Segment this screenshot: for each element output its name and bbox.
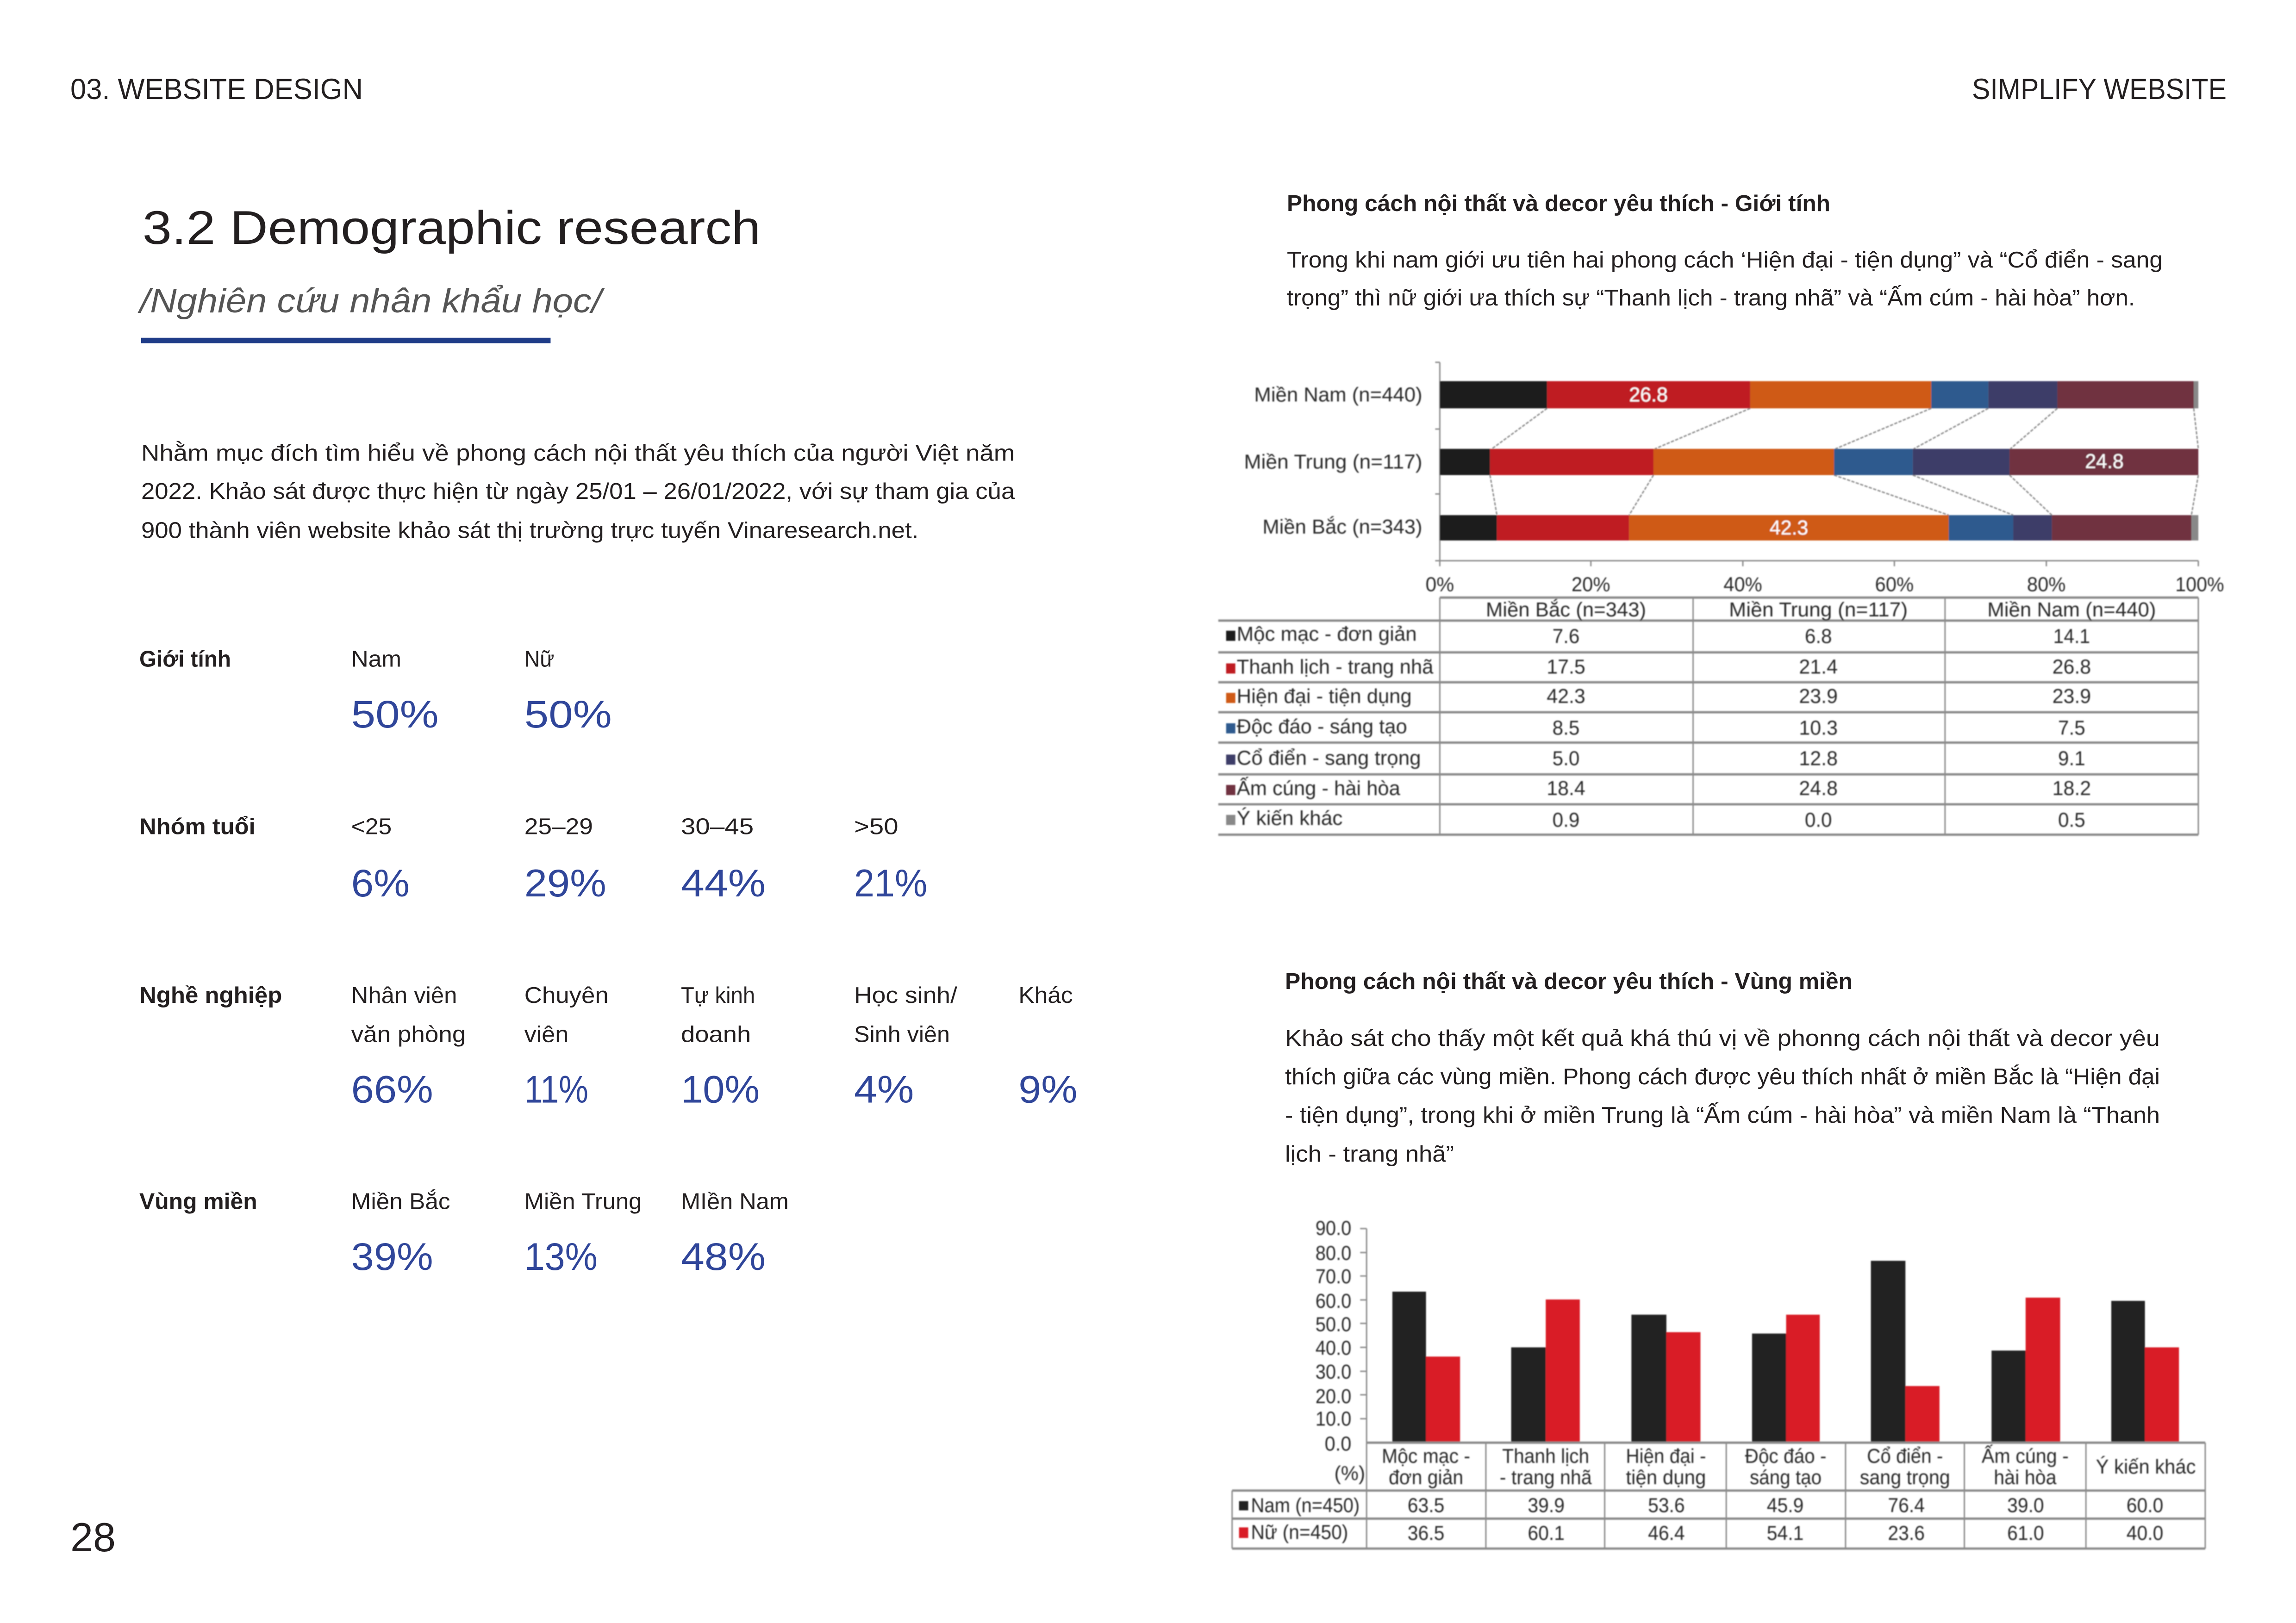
heading: region section: Phong cách nội thất và decor yêu thích - Vùng miền [1285,969,1853,994]
row: Nam: 76.4 [1888,1494,1925,1517]
title underline [141,338,550,343]
region labels: Miền Trung (n=117) [1244,451,1423,473]
stat: 30-45 [681,815,766,905]
category labels: Ý kiến khác [2096,1455,2196,1478]
y axis and labels: 30.0 [1316,1361,1351,1383]
row: cozy: 18.4 [1547,777,1585,800]
row: cozy: 18.2 [2053,777,2091,800]
category labels: sáng tạo [1750,1466,1822,1489]
row: Nữ: 60.1 [1528,1522,1565,1544]
chart: stacked bars by region [1218,362,2224,835]
stat: south [681,1189,789,1278]
bars: Nữ (red) [1426,1298,2179,1443]
stat: office workers: Nhân viên [351,983,457,1008]
stat: students [854,983,957,1111]
label: occupation: Nghề nghiệp [139,983,282,1008]
stat: 30-45: 44% [681,861,766,905]
row: classic: 12.8 [1799,747,1838,770]
intro paragraph: 2022. Khảo sát được thực hiện từ ngày 25/01 – 26/01/2022, với sự tham gia của [141,479,1015,504]
row: modern [1226,685,2091,708]
category labels: đơn giản [1389,1466,1463,1489]
panel: region stats [139,1189,789,1278]
stat: central: 13% [524,1235,598,1278]
stat: under 25: <25 [351,815,392,839]
title: 3.2 Demographic research [143,201,761,254]
stat: other [1018,983,1078,1111]
y axis and labels: 80.0 [1316,1242,1351,1264]
header: project name: SIMPLIFY WEBSITE [1972,73,2227,106]
category labels: tiện dụng [1626,1466,1706,1489]
stat: south: 48% [681,1235,766,1278]
stat: 25-29: 25–29 [524,815,593,839]
text block: gender section: Trong khi nam giới ưu tiên hai phong cách ‘Hiện đại - tiện dụng” và “Cổ điển - sang [1287,248,2163,273]
row: cozy [1226,777,2091,800]
percent axis labels: 80% [2027,573,2065,596]
row: classic [1226,746,2085,770]
row: Nữ: 46.4 [1648,1522,1685,1544]
y axis and labels: 20.0 [1316,1385,1351,1408]
stat: central [524,1189,642,1278]
row: Nam: 60.0 [2127,1494,2163,1517]
category labels [1382,1444,2196,1489]
stat: specialists [524,983,609,1111]
bar: south [1440,381,2198,408]
page number: 28 [70,1514,116,1560]
stat: students: Học sinh/ [854,983,957,1008]
row: modern: 42.3 [1547,685,1585,708]
row: other: 0.0 [1805,809,1832,832]
row: creative: 8.5 [1553,717,1579,740]
label: gender: Giới tính [139,647,231,672]
percent axis labels: 0% [1426,573,1454,596]
text block: region section [1285,1026,2160,1167]
row: rustic: 7.6 [1553,625,1579,648]
row: rustic [1226,623,2090,648]
y axis and labels: 40.0 [1316,1337,1351,1359]
row: Nữ [1239,1521,2163,1544]
data table: region: Miền Trung (n=117) [1729,598,1908,621]
text block: region section: thích giữa các vùng miền. Phong cách được yêu thích nhất ở miền Bắc là “Hiện đại [1285,1064,2160,1089]
stat: students: 4% [854,1068,914,1111]
stat: 30-45: 30–45 [681,815,754,839]
stat: over 50: >50 [854,815,898,839]
row: Nam: 39.0 [2007,1494,2044,1517]
category labels: Mộc mạc - [1382,1445,1470,1468]
row: Nữ: 54.1 [1767,1522,1803,1544]
text block: region section: - tiện dụng”, trong khi ở miền Trung là “Ấm cúm - hài hòa” và miền Nam là “Thanh [1285,1103,2160,1128]
stat: 25-29: 29% [524,861,606,905]
stat: office workers: văn phòng [351,1022,466,1047]
row: elegant: 17.5 [1547,655,1585,678]
stat: north: Miền Bắc [351,1189,450,1214]
stat: specialists: 11% [524,1068,588,1111]
row: creative: 7.5 [2058,717,2085,740]
text block: gender section [1287,248,2163,311]
chart: clustered bars by gender [1232,1217,2205,1548]
row: elegant [1226,655,2091,678]
row: classic: 9.1 [2058,747,2085,770]
data table: region: Miền Bắc (n=343) [1486,598,1646,621]
row: Nam: 45.9 [1767,1494,1803,1517]
intro paragraph: Nhằm mục đích tìm hiểu về phong cách nội thất yêu thích của người Việt năm [141,441,1015,466]
row: Nam [1239,1494,2163,1517]
stat: specialists: viên [524,1022,568,1047]
y axis and labels: 90.0 [1316,1217,1351,1240]
row: classic: 5.0 [1553,747,1579,770]
row: creative: Độc đáo - sáng tạo [1237,715,1407,738]
region labels [1244,383,1423,538]
stat: under 25 [351,815,410,905]
intro paragraph: 900 thành viên website khảo sát thị trường trực tuyến Vinaresearch.net. [141,518,918,543]
label: region: Vùng miền [139,1189,257,1214]
row: other [1226,807,2085,832]
percent axis labels: 20% [1572,573,1610,596]
stat: self-employed: Tự kinh [681,983,755,1008]
bars: Nam (black) [1392,1261,2145,1443]
stat: male: 50% [351,692,439,736]
row: rustic: Mộc mạc - đơn giản [1237,623,1417,646]
connector lines [1490,408,2198,515]
data table: region: Miền Nam (n=440) [1987,598,2156,621]
row: Nữ: 23.6 [1888,1522,1925,1544]
panel: gender stats [139,647,612,736]
category labels: Cổ điển - [1867,1445,1943,1468]
stat: self-employed: 10% [681,1068,760,1111]
percent axis labels [1426,573,2224,596]
row: Nữ: Nữ (n=450) [1251,1521,1348,1543]
stat: over 50: 21% [854,861,927,905]
row: classic: Cổ điển - sang trọng [1237,746,1421,769]
bar: central: 24.8 [2085,450,2124,473]
y axis and labels [1316,1217,1366,1485]
heading: gender section: Phong cách nội thất và decor yêu thích - Giới tính [1287,191,1830,216]
row: elegant: 21.4 [1799,655,1838,678]
row: modern: 23.9 [1799,685,1838,708]
stat: south: MIền Nam [681,1189,789,1214]
stat: specialists: Chuyên [524,983,609,1008]
y axis and labels: (%) [1335,1462,1365,1485]
stat: office workers: 66% [351,1068,433,1111]
percent axis labels: 40% [1723,573,1762,596]
stat: male [351,647,439,736]
text block: region section: Khảo sát cho thấy một kết quả khá thú vị về phonng cách nội thất và decor yêu [1285,1026,2160,1051]
category labels: sang trọng [1860,1466,1950,1489]
row: Nữ: 61.0 [2007,1522,2044,1544]
axes [1435,362,2198,566]
percent axis labels: 60% [1875,573,1914,596]
row: Nam: Nam (n=450) [1251,1494,1360,1517]
percent axis labels: 100% [2175,573,2224,596]
y axis and labels: 70.0 [1316,1265,1351,1288]
stat: under 25: 6% [351,861,410,905]
intro paragraph [141,441,1015,543]
stat: central: Miền Trung [524,1189,642,1214]
stat: female [524,647,612,736]
category labels: Thanh lịch [1502,1445,1589,1468]
category labels: hài hòa [1994,1466,2057,1489]
text block: gender section: trọng” thì nữ giới ưa thích sự “Thanh lịch - trang nhã” và “Ấm cúm - hài hòa” hơn. [1287,286,2135,311]
data table: region [1218,597,2198,835]
stat: female: Nữ [524,647,554,672]
y axis and labels: 60.0 [1316,1290,1351,1312]
stat: female: 50% [524,692,612,736]
y axis and labels: 0.0 [1325,1432,1351,1455]
row: modern: 23.9 [2053,685,2091,708]
row: rustic: 6.8 [1805,625,1832,648]
row: Nam: 63.5 [1408,1494,1444,1517]
category labels: - trang nhã [1500,1466,1592,1489]
stat: 25-29 [524,815,606,905]
row: modern: Hiện đại - tiện dụng [1237,685,1412,708]
row: Nữ: 40.0 [2127,1522,2163,1544]
bar: south: 26.8 [1629,383,1668,406]
stat: other: 9% [1018,1068,1078,1111]
row: elegant: Thanh lịch - trang nhã [1237,655,1434,678]
y axis and labels: 10.0 [1316,1408,1351,1430]
label: age group: Nhóm tuổi [139,815,256,839]
bar: north [1440,515,2198,541]
panel: occupation stats [139,983,1078,1111]
stat: north: 39% [351,1235,433,1278]
row: Nam: 39.9 [1528,1494,1565,1517]
stat: self-employed: doanh [681,1022,751,1047]
y axis and labels: 50.0 [1316,1313,1351,1336]
data table: gender [1232,1443,2205,1548]
row: elegant: 26.8 [2053,655,2091,678]
row: rustic: 14.1 [2053,625,2090,648]
region labels: Miền Nam (n=440) [1254,383,1423,406]
text block: region section: lịch - trang nhã” [1285,1142,1454,1167]
stat: office workers [351,983,466,1111]
row: other: 0.5 [2058,809,2085,832]
row: creative: 10.3 [1799,717,1838,740]
subtitle: /Nghiên cứu nhân khẩu học/ [137,281,605,320]
row: creative [1226,715,2085,740]
stat: over 50 [854,815,927,905]
stat: male: Nam [351,647,401,672]
row: other: Ý kiến khác [1237,807,1342,830]
bar: north: 42.3 [1770,516,1808,539]
row: other: 0.9 [1553,809,1579,832]
row: cozy: 24.8 [1799,777,1838,800]
category labels: Độc đáo - [1745,1445,1827,1468]
header: section name: 03. WEBSITE DESIGN [70,73,363,106]
row: Nam: 53.6 [1648,1494,1685,1517]
row: cozy: Ấm cúng - hài hòa [1237,777,1400,800]
stat: north [351,1189,450,1278]
panel: age group stats [139,815,927,905]
stat: students: Sinh viên [854,1022,950,1047]
stat: self-employed [681,983,760,1111]
category labels: Hiện đại - [1626,1445,1706,1468]
stat: other: Khác [1018,983,1073,1008]
region labels: Miền Bắc (n=343) [1262,516,1423,538]
category labels: Ấm cúng - [1982,1444,2069,1468]
row: Nữ: 36.5 [1408,1522,1444,1544]
bar: central [1440,449,2198,475]
